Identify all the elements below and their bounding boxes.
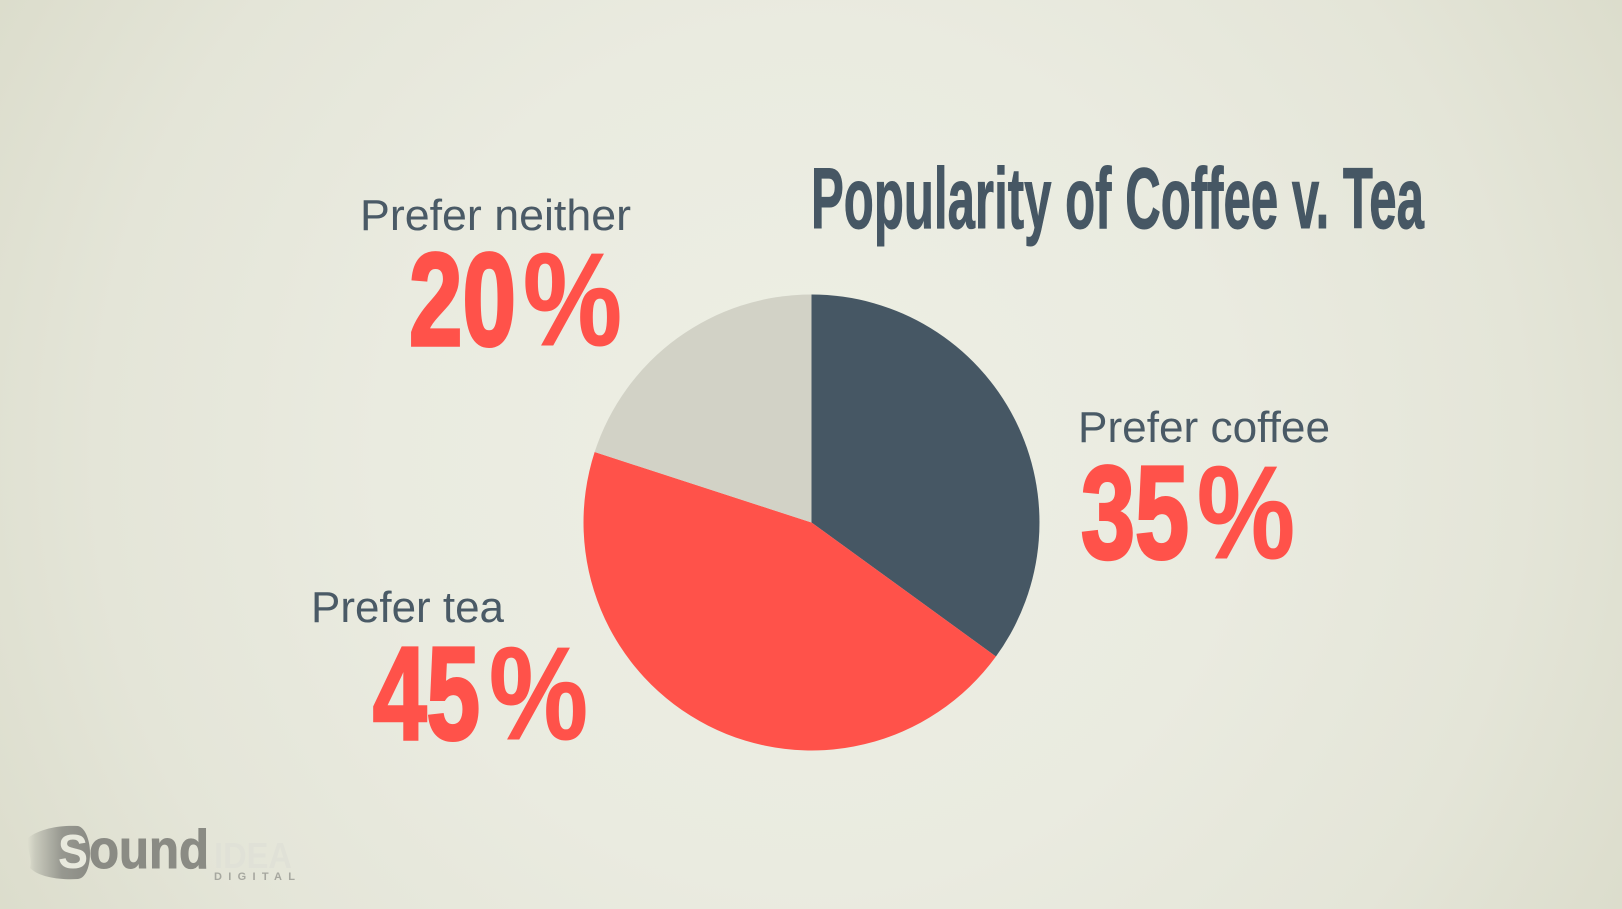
value: 45%: [373, 620, 588, 767]
label: prefer coffee: [1078, 403, 1330, 586]
value: 20%: 20: [409, 226, 516, 373]
logo word ound: ound: [89, 818, 209, 880]
value: 45%: %: [489, 620, 588, 767]
pie slice: prefer coffee 35%: [812, 294, 1039, 656]
value: 35%: [1081, 439, 1295, 586]
logo: Sound Idea Digital: [28, 818, 295, 883]
value: 20%: %: [523, 226, 622, 373]
value: 35%: %: [1197, 439, 1295, 586]
caption: prefer tea: Prefer tea: [311, 583, 505, 632]
value: 20%: [409, 226, 622, 373]
value: 35%: 35: [1081, 439, 1189, 586]
pie slice: prefer neither 20%: [595, 294, 812, 522]
logo word IDEA: IDEA: [214, 835, 292, 876]
pie slice: prefer tea 45%: [584, 452, 996, 750]
logo word DIGITAL: DIGITAL: [214, 871, 295, 883]
caption: prefer coffee: Prefer coffee: [1078, 403, 1330, 452]
pie chart: [584, 294, 1039, 750]
logo letter S: S: [58, 826, 88, 879]
value: 45%: 45: [373, 620, 480, 767]
logo swoosh: [28, 826, 90, 879]
label: prefer neither: [360, 191, 631, 373]
label: prefer tea: [311, 583, 588, 767]
caption: prefer neither: Prefer neither: [360, 191, 631, 240]
